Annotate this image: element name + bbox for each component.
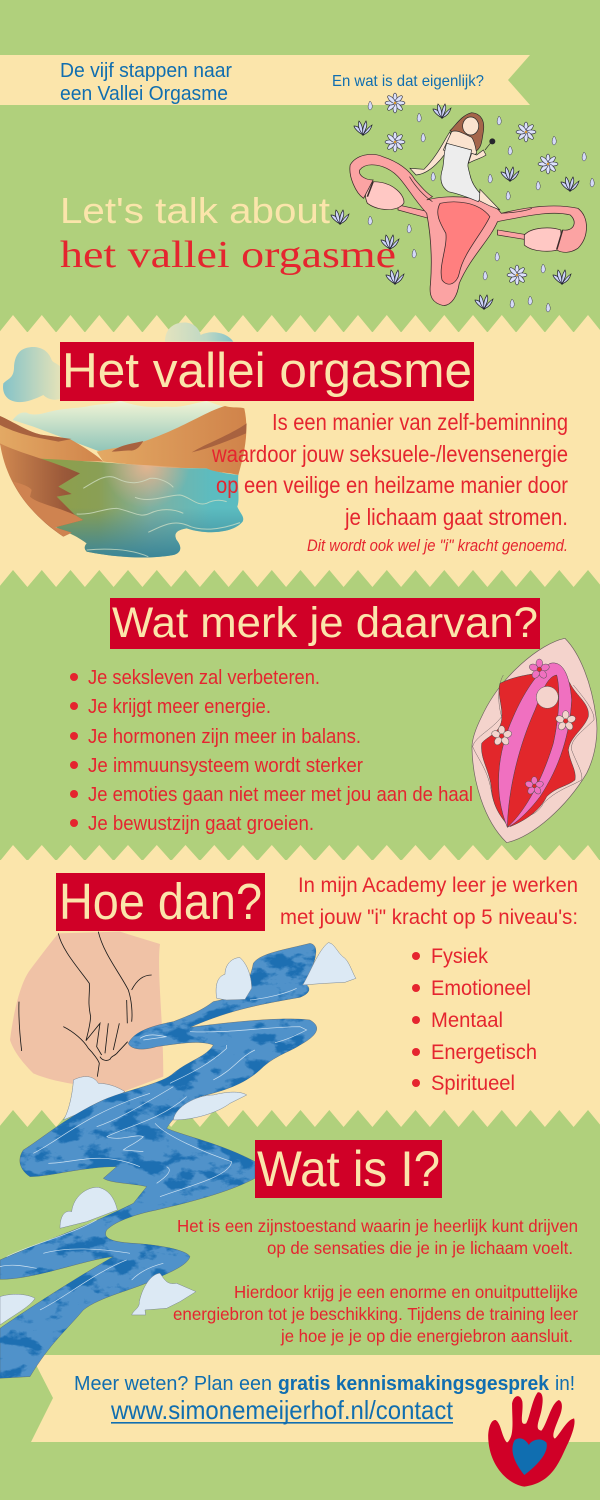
sky: [13, 401, 223, 452]
river: [0, 943, 317, 1378]
illustration: scattered flowers and petals: [331, 93, 594, 312]
call to action text: in!: [555, 1373, 575, 1395]
bullet list: five levels: Fysiek: [431, 945, 488, 968]
text block: academy intro: [280, 874, 578, 929]
illustration: valley landscape: [0, 323, 247, 557]
bullet list: five levels: Mentaal: [431, 1009, 503, 1032]
text block: vallei orgasme description: je lichaam gaat stromen.: [344, 504, 568, 530]
hand lines: [19, 932, 152, 1077]
icon: red hand with blue heart: [488, 1392, 575, 1487]
river white lines: [0, 988, 307, 1310]
panel: section 1 cream background: [0, 315, 600, 587]
hair: [450, 113, 484, 152]
bullet list: effects: Je hormonen zijn meer in balans.: [88, 726, 361, 748]
rocks in front of river: [0, 943, 356, 1325]
heading box: het vallei orgasme: Het vallei orgasme: [62, 344, 472, 398]
heading box: wat merk je daarvan: Wat merk je daarvan?: [112, 599, 538, 647]
call to action text: gratis kennismakingsgesprek: [278, 1373, 550, 1395]
bullet list: effects: Je krijgt meer energie.: [88, 696, 271, 718]
text block: academy intro: In mijn Academy leer je werken: [298, 874, 578, 897]
clouds: [165, 323, 233, 342]
white dress and legs: [441, 143, 482, 202]
text block: what is i explanation: [173, 1216, 578, 1346]
text block: what is i explanation: Het is een zijnstoestand waarin je heerlijk kunt drijven: [177, 1216, 578, 1236]
bullet list: effects: Je immuunsysteem wordt sterker: [88, 755, 363, 777]
text block: vallei orgasme description: [211, 409, 568, 555]
title: let's talk about: Let's talk about: [60, 190, 330, 231]
arms and chest: [410, 132, 452, 175]
bullet list: effects: Je emoties gaan niet meer met jou aan de haal: [88, 784, 473, 806]
call to action text: [74, 1373, 575, 1425]
bullet list: five levels: Spiritueel: [431, 1072, 515, 1095]
illustration: body, hands and flowing river: [0, 932, 356, 1380]
lake ripples: [77, 477, 240, 557]
flower in hand: [485, 142, 492, 150]
ribbon text: question: En wat is dat eigenlijk?: [332, 73, 484, 90]
bullet list: five levels: Emotioneel: [431, 977, 531, 1000]
top ribbon banner: [0, 55, 530, 105]
text block: what is i explanation: energiebron tot je beschikking. Tijdens de training leer: [173, 1304, 578, 1324]
heading box: hoe dan: Hoe dan?: [59, 873, 262, 930]
bullet list: five levels: [412, 945, 537, 1095]
ribbon text: de vijf stappen: een Vallei Orgasme: [60, 83, 228, 105]
feet: [479, 189, 500, 210]
river mottled texture: [0, 940, 327, 1380]
lake: [37, 458, 243, 557]
bullet list: effects: Je seksleven zal verbeteren.: [88, 667, 320, 689]
text block: what is i explanation: op de sensaties die je in je lichaam voelt.: [267, 1238, 573, 1258]
ribbon text: de vijf stappen: De vijf stappen naar: [60, 60, 232, 82]
title: het vallei orgasme: het vallei orgasme: [60, 234, 396, 276]
small flowers: [491, 659, 577, 795]
text block: what is i explanation: Hierdoor krijg je een enorme en onuitputtelijke: [234, 1282, 578, 1302]
illustration: woman sitting on the uterus: [410, 113, 500, 210]
bullet list: five levels: Energetisch: [431, 1041, 537, 1064]
contact link: www.simonemeijerhof.nl/contact: [110, 1395, 454, 1425]
rocks behind river: [60, 1077, 125, 1228]
panel: section 3 cream background: [0, 845, 600, 1127]
bullet list: effects: [70, 667, 473, 835]
call to action text: Meer weten? Plan een: [74, 1373, 272, 1395]
ribbon text: de vijf stappen: [60, 60, 232, 105]
illustration: vulva with flowers: [472, 638, 597, 843]
heading box: wat is i: Wat is I?: [257, 1141, 440, 1197]
text block: what is i explanation: je hoe je je op die energiebron aansluit.: [280, 1326, 573, 1346]
mountains: [0, 416, 103, 462]
left rock wall: [0, 443, 83, 537]
bottom ribbon banner background: [31, 1355, 600, 1442]
body: [10, 932, 163, 1092]
illustration: uterus: [350, 154, 586, 306]
bullet list: effects: Je bewustzijn gaat groeien.: [88, 813, 314, 835]
text block: vallei orgasme description: Dit wordt ook wel je "i" kracht genoemd.: [307, 537, 568, 555]
text block: academy intro: met jouw "i" kracht op 5 niveau's:: [280, 906, 578, 929]
